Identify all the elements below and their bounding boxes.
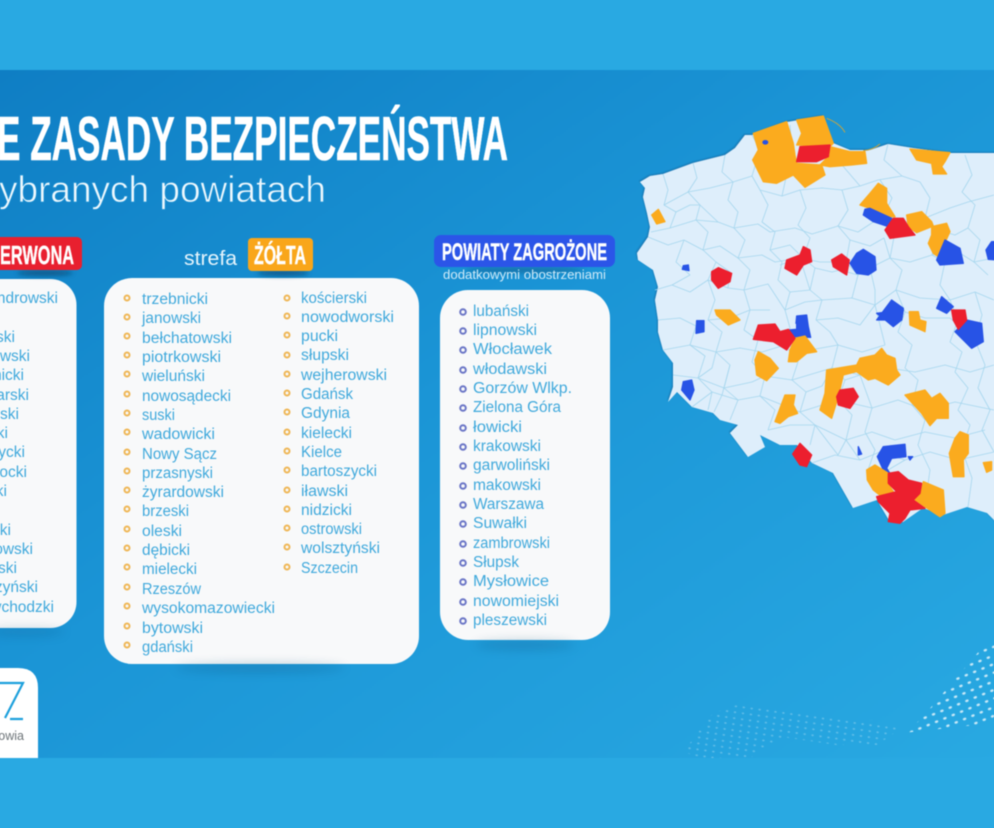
- panel: endangered counties list: Zielona Góra: [473, 399, 561, 416]
- panel: endangered counties list: Słupsk: [473, 554, 519, 571]
- column one: suski: [142, 407, 175, 424]
- yellow zone: north east: [652, 149, 950, 257]
- blue counties: south: [682, 310, 983, 473]
- red zone: south: [753, 310, 967, 523]
- panel: endangered counties list: Warszawa: [473, 496, 544, 513]
- column one: janowski: [141, 310, 201, 327]
- column one: bełchatowski: [142, 330, 232, 347]
- panel: endangered counties list: Gorzów Wlkp.: [473, 380, 572, 397]
- card and pill shadows: [0, 267, 585, 673]
- column one: gdański: [142, 639, 193, 656]
- map of Poland: [637, 116, 994, 530]
- panel: endangered counties list: włodawski: [472, 361, 547, 378]
- column one: [124, 291, 275, 656]
- panel: endangered counties list: Mysłowice: [473, 573, 549, 590]
- heading: endangered counties: [434, 235, 615, 282]
- column one: Rzeszów: [142, 581, 202, 598]
- endangered: Słupsk: [762, 140, 768, 145]
- column one: wieluński: [141, 368, 205, 385]
- panel: endangered counties list: zambrowski: [473, 535, 550, 552]
- yellow zone: Pomerania: [753, 116, 880, 187]
- panel: endangered counties list: łowicki: [473, 419, 522, 436]
- panel: red zone list: wski: [0, 348, 30, 365]
- column two: nowodworski: [301, 309, 394, 326]
- panel: endangered counties list: Suwałki: [473, 515, 527, 532]
- column one: żyrardowski: [142, 484, 224, 501]
- red zone: Pomerania: [797, 145, 830, 162]
- blue counties: north: [682, 208, 994, 323]
- column two: wolsztyński: [300, 540, 380, 557]
- column one: Nowy Sącz: [142, 446, 217, 463]
- column two: słupski: [301, 347, 349, 364]
- column two: kościerski: [301, 290, 367, 307]
- heading: red zone pill: [0, 237, 82, 270]
- panel: endangered counties list: garwoliński: [473, 457, 550, 474]
- column two: wejherowski: [300, 367, 387, 384]
- panel: endangered counties list: makowski: [473, 477, 541, 494]
- county borders: [648, 125, 994, 507]
- column one: bytowski: [142, 620, 203, 637]
- yellow zone: south: [715, 310, 992, 517]
- column two: ostrowski: [301, 521, 362, 538]
- logo mark: [0, 683, 23, 719]
- panel: endangered counties list: lubański: [473, 303, 529, 320]
- column one: oleski: [142, 523, 182, 540]
- panel: endangered counties list: Włocławek: [473, 341, 552, 358]
- decorative dotted wave: [683, 640, 994, 758]
- panel: endangered counties list: lipnowski: [473, 322, 537, 339]
- heading: yellow zone: strefa: [184, 248, 238, 270]
- top half coloured counties: [652, 116, 994, 323]
- panel: red zone list: ski: [0, 406, 19, 423]
- panel: endangered counties list: nowomiejski: [473, 593, 559, 610]
- column one: wysokomazowiecki: [141, 600, 275, 617]
- panel: endangered counties list: [440, 290, 610, 640]
- column one: nowosądecki: [142, 388, 231, 405]
- column two: iławski: [301, 483, 348, 500]
- country outline: [637, 116, 994, 530]
- column one: trzebnicki: [142, 291, 208, 308]
- panel: red zone list: ki: [0, 522, 11, 539]
- column two: Gdańsk: [301, 386, 353, 403]
- red counties: north: [712, 218, 915, 288]
- panel: endangered counties list: krakowski: [473, 438, 541, 455]
- column two: Szczecin: [301, 560, 358, 577]
- heading: yellow zone: ŻÓŁTA: [254, 240, 306, 270]
- panel: yellow zone list: [104, 278, 419, 664]
- title: E ZASADY BEZPIECZEŃSTWA: [0, 105, 508, 174]
- heading: endangered counties: POWIATY ZAGROŻONE: [442, 239, 607, 266]
- heading: red zone pill: ERWONA: [0, 240, 74, 270]
- subtitle: ybranych powiatach: [0, 169, 326, 210]
- column two: [284, 290, 394, 577]
- column two: pucki: [301, 328, 338, 345]
- column two: Gdynia: [301, 405, 350, 422]
- column two: Kielce: [301, 444, 342, 461]
- column one: brzeski: [142, 503, 189, 520]
- heading: endangered counties: dodatkowymi obostrzeniami: [443, 268, 606, 282]
- column one: mielecki: [142, 561, 197, 578]
- column one: piotrkowski: [142, 349, 221, 366]
- column two: nidzicki: [301, 502, 352, 519]
- column one: wadowicki: [141, 426, 215, 443]
- panel: red zone list: ocki: [0, 464, 27, 481]
- column two: kielecki: [301, 425, 352, 442]
- logo card: [0, 668, 38, 758]
- column one: dębicki: [142, 542, 190, 559]
- panel: endangered counties list: pleszewski: [473, 612, 547, 629]
- heading: yellow zone: [184, 238, 313, 271]
- column one: przasnyski: [142, 465, 213, 482]
- panel: red zone list: [0, 279, 76, 628]
- bottom half coloured counties: [682, 310, 992, 523]
- column two: bartoszycki: [301, 463, 377, 480]
